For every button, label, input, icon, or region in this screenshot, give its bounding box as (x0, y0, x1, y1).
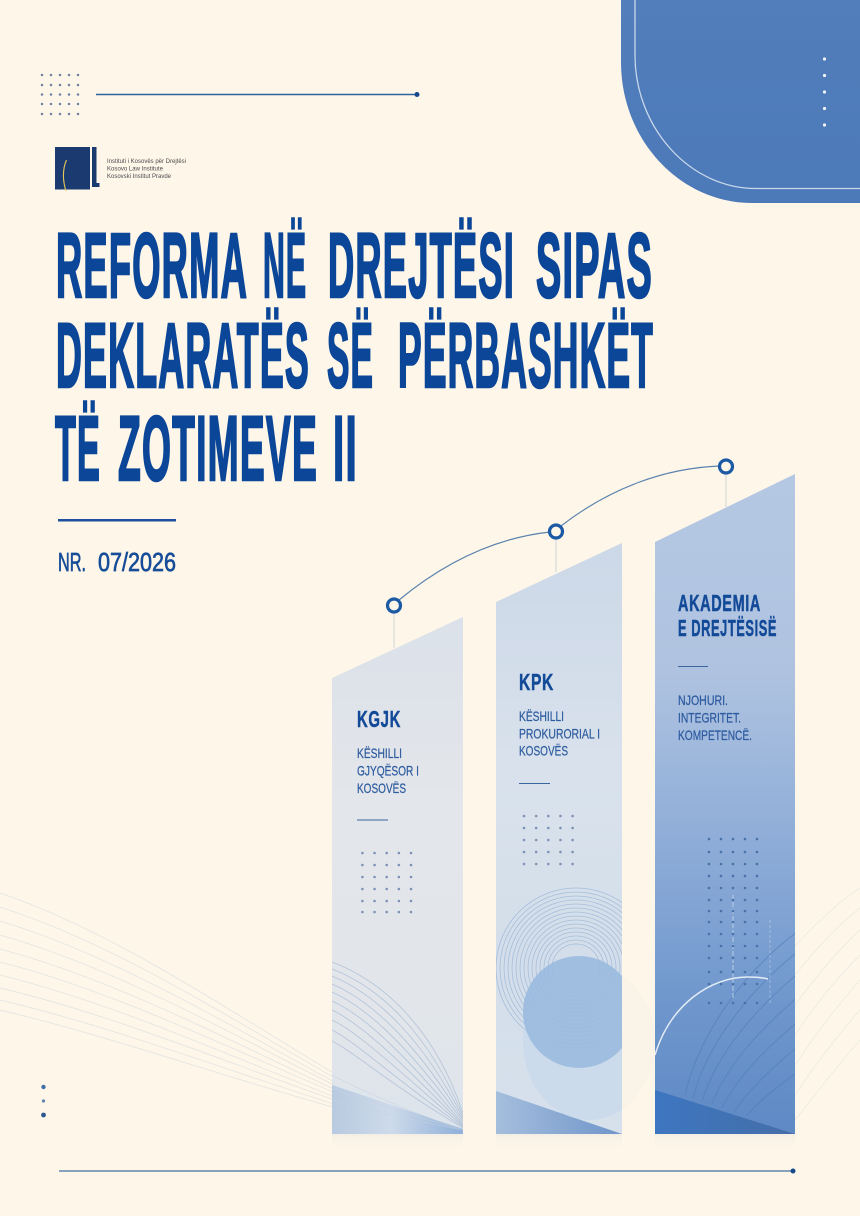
Akademia bottom wedge and arcs (655, 895, 800, 1134)
Akademia heading: E DREJTËSISË (678, 615, 777, 641)
title: DEKLARATËS (56, 305, 310, 407)
issue number: NR. (58, 547, 86, 577)
decorative corner panel (621, 0, 860, 203)
title: SË (327, 305, 374, 407)
panel: Akademia e Drejtësisë (655, 474, 800, 1134)
Akademia description: INTEGRITET. (678, 710, 741, 726)
KPK heading: KPK (519, 669, 554, 695)
title: REFORMA (56, 215, 248, 317)
top rule with end dot (96, 92, 420, 97)
KGJK description: KOSOVËS (357, 780, 406, 796)
Akademia description (678, 692, 752, 743)
soft reflection under bars (332, 1134, 795, 1152)
KPK description (519, 708, 600, 758)
Akademia heading: AKADEMIA (678, 590, 761, 616)
background curved lines left (0, 893, 340, 1109)
title (55, 215, 654, 500)
KPK description: KOSOVËS (519, 742, 568, 758)
logo: Kosovo Law Institute: Kosovo Law Institute (107, 166, 164, 172)
background curved lines right (795, 888, 860, 1120)
KPK description: KËSHILLI (519, 708, 564, 724)
text: SIPAS (536, 215, 653, 317)
logo: Kosovo Law Institute (55, 147, 186, 191)
KPK dot grid (524, 816, 574, 864)
panel: KPK (496, 543, 622, 1134)
panel: KGJK (332, 617, 463, 1134)
Akademia description: NJOHURI. (678, 692, 728, 708)
KGJK description (357, 745, 419, 796)
issue number: 07/2026 (98, 547, 176, 577)
title: ZOTIMEVE (118, 398, 318, 500)
title rule (58, 519, 176, 522)
Akademia heading (678, 590, 777, 641)
KGJK dot grid (362, 853, 412, 912)
title: NË (263, 215, 307, 317)
KGJK heading: KGJK (357, 706, 401, 732)
Akademia dot grid (709, 839, 758, 1003)
rising connector with nodes (388, 460, 732, 648)
Akademia description: KOMPETENCË. (678, 727, 752, 743)
KPK bottom wedge and circles (496, 888, 622, 1134)
top dot grid (42, 75, 79, 114)
title: TË (55, 398, 101, 500)
title: II (333, 398, 358, 500)
issue number (58, 547, 176, 577)
logo: Kosovo Law Institute: Instituti i Kosovës për Drejtësi (107, 159, 186, 165)
KGJK description: GJYQËSOR I (357, 762, 419, 778)
KGJK bottom wedge and arcs (332, 962, 463, 1134)
title: DREJTËSI (328, 215, 515, 317)
logo: Kosovo Law Institute: Kosovski Institut Pravde (107, 174, 172, 180)
KPK description: PROKURORIAL I (519, 726, 600, 742)
bottom rule with end dot (59, 1168, 796, 1174)
KGJK description: KËSHILLI (357, 745, 402, 761)
left side dots (41, 1085, 46, 1117)
